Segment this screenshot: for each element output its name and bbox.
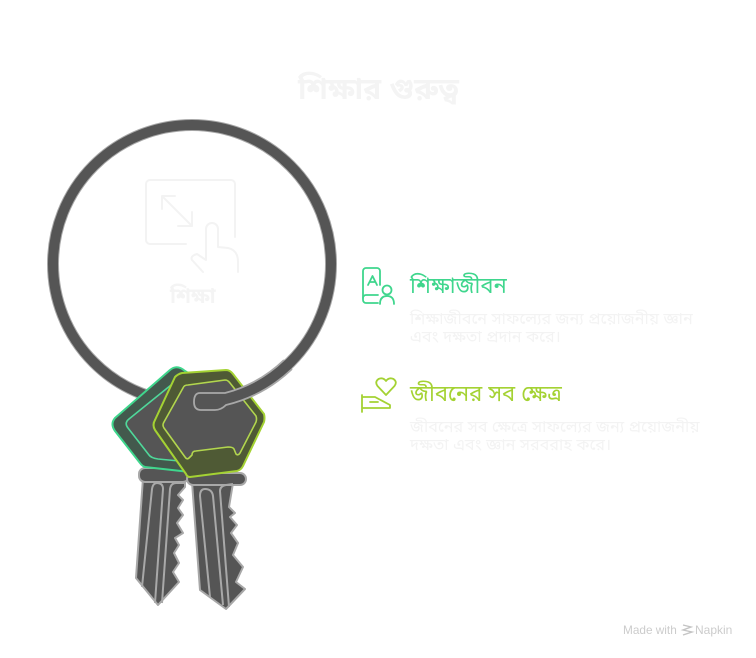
watermark: Napkin: Napkin <box>695 623 732 637</box>
icon: hand and heart <box>362 378 396 412</box>
label: education: শিক্ষা <box>170 285 216 308</box>
title: শিক্ষার গুরুত্ব <box>298 73 459 106</box>
right key: lime <box>154 370 264 609</box>
text: student life description: শিক্ষাজীবনে সাফল্যের জন্য প্রয়োজনীয় জ্ঞান <box>410 310 693 328</box>
left key blade <box>136 468 189 605</box>
heading: student life: শিক্ষাজীবন <box>410 273 507 298</box>
left key head <box>112 367 200 472</box>
ring <box>53 125 331 403</box>
icon: Napkin logo <box>683 625 692 635</box>
left key: green <box>112 367 200 605</box>
text: all areas of life description: জীবনের সব ক্ষেত্রে সাফল্যের জন্য প্রয়োজনীয় <box>410 418 699 436</box>
text: student life description: এবং দক্ষতা প্রদান করে। <box>410 328 561 346</box>
icon: book and person <box>363 268 394 304</box>
right key blade <box>187 473 246 609</box>
watermark: made with: Made with <box>623 623 677 637</box>
ring end through key hole <box>194 360 292 410</box>
text: all areas of life description <box>410 418 700 454</box>
right key head <box>154 370 264 477</box>
text: student life description <box>410 310 693 346</box>
heading: all areas of life: জীবনের সব ক্ষেত্র <box>410 381 562 406</box>
text: all areas of life description: দক্ষতা এবং জ্ঞান সরবরাহ করে। <box>410 436 611 454</box>
icon: resize and tap <box>146 180 238 272</box>
